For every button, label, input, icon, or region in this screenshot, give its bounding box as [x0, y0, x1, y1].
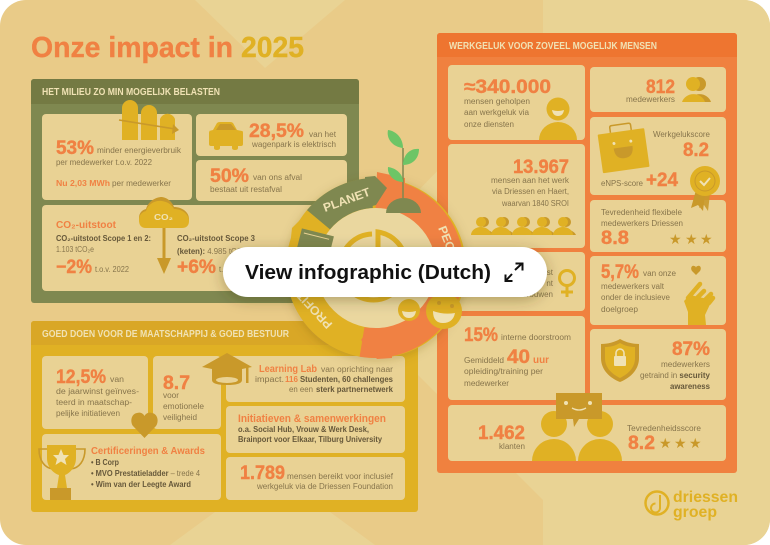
card: doorstroom: Gemiddeld [464, 356, 504, 365]
card: initiatieven: Initiatieven & samenwerkingen [238, 413, 386, 425]
card: learning lab [226, 356, 405, 402]
icon: row of people [471, 217, 576, 235]
heading: milieu: HET MILIEU ZO MIN MOGELIJK BELASTEN [42, 87, 220, 98]
card: learning lab: sterk partnernetwerk [316, 385, 394, 394]
card: CO2-uitstoot: +6% [177, 257, 216, 278]
icon: large smiley [426, 293, 462, 329]
card: inclusieve doelgroep: onder de inclusieve [601, 293, 671, 302]
heading: maatschappij: GOED DOEN VOOR DE MAATSCHAPPIJ & GOED BESTUUR [42, 329, 290, 340]
card: CO2-uitstoot: t.o.v. 2022 [219, 265, 254, 274]
card: afval: van ons afval [253, 173, 302, 182]
card: energieverbruik: per medewerker t.o.v. 2022 [56, 158, 153, 167]
card: werkgeluksscore: Werkgelukscore [653, 130, 711, 139]
card: security awareness: awareness [670, 382, 711, 391]
card: vrouwen [448, 252, 585, 311]
icon: rating stars: ★ [674, 436, 687, 452]
icon: smiling person [539, 98, 577, 140]
card: flexibele medewerkers: 8.8 [601, 228, 629, 249]
icon: cloud with arrow: CO₂ [154, 212, 173, 222]
card: doorstroom: interne doorstroom [501, 333, 571, 342]
icon: rosette badge [690, 166, 720, 211]
card: 13.967: mensen aan het werk [491, 176, 570, 185]
icon: three stars [669, 232, 713, 248]
card: 340.000: aan werkgeluk via [464, 108, 530, 117]
card: werkgeluksscore: eNPS-score [601, 179, 644, 188]
card: certificeringen: • Wim van der Leegte Award [91, 480, 191, 489]
card: jaarwinst [42, 356, 148, 429]
card: 340.000: ≈340.000 [464, 77, 551, 98]
card: wagenpark [196, 114, 347, 156]
card: inclusieve doelgroep [590, 256, 726, 325]
card: inclusieve doelgroep: medewerkers valt [601, 282, 665, 291]
card: 812 medewerkers: medewerkers [626, 95, 675, 104]
card: energieverbruik: 53% [56, 138, 94, 159]
card: CO2-uitstoot: −2% [56, 257, 92, 278]
icon: trophy [39, 445, 85, 500]
title: 2025 [241, 32, 304, 64]
card: afval: bestaat uit restafval [210, 185, 282, 194]
segment: people: PEOPLE [435, 224, 467, 275]
card: foundation: mensen bereikt voor inclusief [287, 472, 394, 481]
card: CO2-uitstoot [42, 197, 347, 291]
card: learning lab: van oprichting naar [321, 365, 393, 374]
card: afval: 50% [210, 166, 249, 187]
card: energieverbruik: minder energieverbruik [97, 146, 182, 155]
heading: werkgeluk: WERKGELUK VOOR ZOVEEL MOGELIJK MENSEN [449, 41, 657, 52]
card: jaarwinst: teerd in maatschap- [56, 398, 132, 407]
icon: document [296, 228, 334, 262]
card: certificeringen: • B Corp [91, 458, 119, 467]
card: emotionele veiligheid: voor [163, 391, 179, 400]
card: doorstroom [448, 316, 585, 400]
card: CO2-uitstoot: (keten): 4.985 tCO₂e [177, 247, 251, 256]
icon: rating stars: ★ [689, 436, 702, 452]
logo: driessen groep [646, 489, 738, 521]
card: werkgeluksscore: +24 [646, 170, 678, 191]
card: certificeringen [39, 434, 221, 500]
icon: rating stars [659, 436, 702, 452]
card: energieverbruik: per medewerker [112, 179, 171, 188]
card: foundation: werkgeluk via de Driessen Foundation [256, 482, 393, 491]
card: wagenpark: van het [309, 130, 337, 139]
card: learning lab: 116 [285, 374, 298, 384]
segment: planet [318, 176, 387, 220]
card: 13.967 [448, 144, 585, 248]
card: emotionele veiligheid: emotionele [163, 402, 205, 411]
card: CO2-uitstoot: CO₂-uitstoot Scope 1 en 2: [56, 234, 151, 243]
card: CO2-uitstoot: 1.103 tCO₂e [56, 245, 94, 254]
card: security awareness: medewerkers [661, 360, 710, 369]
card: emotionele veiligheid: veiligheid [163, 413, 197, 422]
diagram: planet people profit wheel [286, 130, 467, 359]
card: wagenpark: wagenpark is elektrisch [251, 140, 336, 149]
card: initiatieven: o.a. Social Hub, Vrouw & Werk Desk, [238, 425, 369, 434]
icon: graduation cap [202, 353, 252, 385]
card: inclusieve doelgroep: van onze [643, 269, 677, 278]
inner disc [316, 208, 436, 328]
card: security awareness: getraind in security [640, 371, 711, 380]
card: 13.967: 13.967 [513, 157, 569, 178]
segment: profit: PROFIT [293, 288, 335, 332]
card: 13.967: waarvan 1840 SROI [501, 199, 569, 208]
panel: het milieu [31, 79, 359, 303]
icon: three stars: ★ [700, 232, 713, 248]
card: jaarwinst: 12,5% [56, 367, 106, 388]
card: flexibele medewerkers [590, 200, 726, 252]
icon: three stars: ★ [685, 232, 698, 248]
card: 340.000: mensen geholpen [464, 97, 530, 106]
icon: briefcase [597, 121, 650, 173]
card: CO2-uitstoot: t.o.v. 2022 [95, 265, 130, 274]
card: CO2-uitstoot: CO₂-uitstoot [56, 219, 116, 231]
card: emotionele veiligheid [153, 356, 221, 429]
icon: expand arrows [506, 264, 522, 281]
panel: goed doen [31, 321, 418, 512]
segment: profit [293, 220, 376, 343]
card: initiatieven: Brainport voor Elkaar, Tilburg University [238, 435, 383, 444]
card: CO2-uitstoot: CO₂-uitstoot Scope 3 [177, 234, 256, 243]
button: view infographic [223, 247, 547, 297]
icon: two people [682, 77, 711, 102]
card: initiatieven [226, 406, 405, 453]
card: security awareness: 87% [672, 339, 710, 360]
card: flexibele medewerkers: medewerkers Driessen [601, 219, 683, 228]
card: doorstroom: uur [533, 354, 549, 366]
icon: heart [131, 413, 158, 438]
card: vrouwen: vrouwen [523, 290, 553, 299]
card: inclusieve doelgroep: doelgroep [601, 305, 639, 314]
card: foundation [226, 457, 405, 500]
button: view infographic: View infographic (Dutch) [245, 262, 491, 284]
card: 812 medewerkers: 812 [646, 77, 675, 98]
card: 13.967: via Driessen en Haert, [492, 187, 569, 196]
segment: people [361, 172, 467, 359]
card: afval [196, 160, 347, 201]
card: werkgeluksscore: 8.2 [683, 140, 709, 161]
icon: small smiley [398, 299, 420, 321]
logo: driessen groep: driessen [673, 489, 738, 506]
icon: venus symbol [560, 270, 574, 297]
card: jaarwinst: van [110, 375, 124, 384]
title: Onze impact in [31, 32, 233, 64]
card: learning lab: Learning Lab [259, 363, 317, 375]
card: energieverbruik [42, 100, 192, 200]
card: klanten: Tevredenheidsscore [627, 424, 702, 433]
icon: plant sprout [386, 130, 421, 213]
card: doorstroom: 40 [507, 347, 530, 368]
icon: cloud with arrow [139, 197, 189, 274]
icon: finger heart hand [684, 266, 713, 325]
card: doorstroom: 15% [464, 325, 498, 346]
card: vrouwen: st [547, 268, 554, 277]
card: learning lab: impact. [255, 375, 284, 384]
panel: werkgeluk [437, 33, 737, 473]
card: learning lab: en een [289, 385, 313, 394]
card: learning lab: Studenten, 60 challenges [300, 375, 394, 384]
card: klanten [448, 393, 726, 461]
card: foundation: 1.789 [240, 463, 285, 484]
card: vrouwen: nt [546, 279, 554, 288]
icon: three stars: ★ [669, 232, 682, 248]
card: wagenpark: 28,5% [249, 121, 304, 142]
card: klanten: klanten [499, 442, 525, 451]
card: werkgeluksscore [590, 117, 726, 195]
card: flexibele medewerkers: Tevredenheid flexibele [601, 208, 683, 217]
card: 340.000 [448, 65, 585, 140]
card: doorstroom: opleiding/training per [464, 367, 543, 376]
card: jaarwinst: pelijke initiatieven [56, 409, 120, 418]
icon: pie chart [340, 232, 406, 300]
logo: driessen groep: groep [673, 504, 717, 521]
card: security awareness [590, 329, 726, 400]
icon: shield with lock [601, 339, 639, 382]
card: klanten: 1.462 [478, 423, 525, 444]
card: 812 medewerkers [590, 67, 726, 112]
icon: car [209, 122, 243, 150]
icon: two people talking [532, 393, 622, 461]
card: certificeringen: Certificeringen & Awards [91, 445, 205, 457]
icon: rating stars: ★ [659, 436, 672, 452]
card: certificeringen: • MVO Prestatieladder – trede 4 [91, 469, 201, 478]
card: energieverbruik: Nu 2,03 MWh [56, 179, 110, 188]
card: doorstroom: medewerker [464, 379, 509, 388]
card: emotionele veiligheid: 8.7 [163, 373, 190, 394]
card: jaarwinst: de jaarwinst geïnves- [56, 387, 139, 396]
card: 340.000: onze diensten [464, 120, 514, 129]
card: klanten: 8.2 [628, 433, 655, 454]
segment: planet: PLANET [321, 185, 373, 215]
card: inclusieve doelgroep: 5,7% [601, 262, 639, 283]
